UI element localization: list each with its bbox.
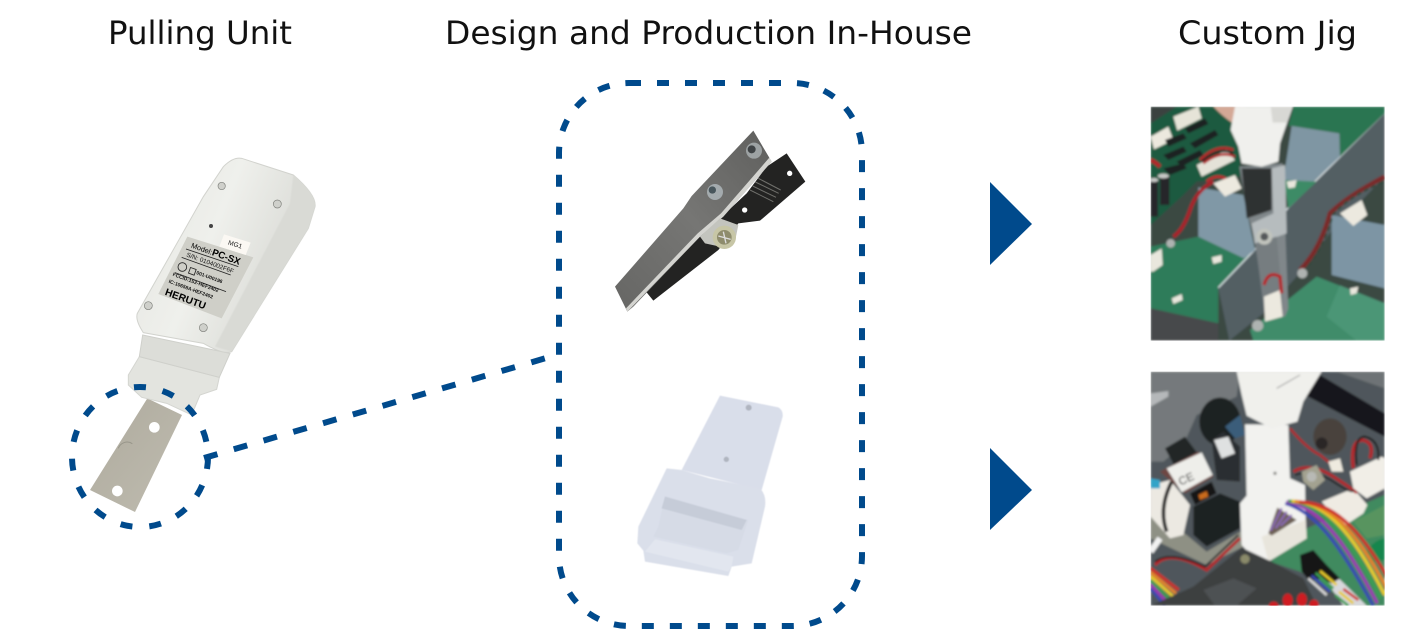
dashed connector line: [204, 356, 553, 458]
white plastic jig: [637, 396, 783, 576]
lower right green board: [1250, 277, 1385, 341]
white printed jig: [1240, 424, 1307, 562]
rainbow ribbon cable: [1285, 501, 1393, 606]
left wires: [1173, 182, 1213, 237]
photo background: [1151, 372, 1385, 606]
right white connectors: [1350, 457, 1385, 498]
upper right green board: [1288, 107, 1385, 157]
left white connector: [1151, 480, 1190, 538]
small rainbow ribbon left: [1151, 568, 1179, 606]
right connector wires: [1353, 440, 1371, 468]
dark black connector: [1300, 550, 1340, 583]
heading: Pulling Unit: Pulling Unit: [108, 14, 292, 52]
grip block: [637, 468, 765, 576]
nut: [1302, 465, 1325, 490]
product label: S/N: 0104002F6F: [185, 252, 235, 275]
right divider panel: [1332, 215, 1385, 288]
top connector wires: [1207, 177, 1230, 182]
photo: clip jig on circuit boards: [1150, 107, 1385, 341]
screws: [707, 143, 762, 200]
metal clip on photo: [1239, 163, 1288, 317]
screws: [1166, 239, 1307, 331]
lower left board connectors: [1151, 248, 1222, 304]
rear black plate: [646, 153, 805, 301]
long divider wall: [1218, 113, 1385, 341]
pulling unit body: [1231, 107, 1293, 167]
housing side shading: [215, 175, 315, 352]
screws: [144, 182, 281, 332]
dark round hole: [1199, 398, 1241, 446]
cable tie: [1328, 458, 1343, 472]
chassis wall: [1151, 372, 1240, 462]
capacitors: [1150, 160, 1169, 217]
photo background: [1151, 107, 1385, 341]
green circuit board: [1270, 495, 1385, 606]
neck: [139, 335, 230, 377]
floor under boards: [1151, 308, 1218, 341]
sensor hole: [209, 224, 213, 228]
pivot bolt: [700, 218, 738, 249]
unit label: [1271, 107, 1292, 123]
metal clip jig: [615, 131, 805, 312]
green capacitor: [1367, 538, 1385, 562]
tongue holes: [746, 405, 752, 411]
front metal plate: [615, 131, 772, 312]
product label: Model:PC-SX: [190, 240, 242, 268]
dashed circle highlighting the tab: [72, 387, 208, 527]
grip recess: [653, 496, 748, 553]
red LEDs: [1269, 593, 1319, 610]
black rail top right: [1305, 375, 1385, 437]
small ribbons bottom: [1308, 571, 1358, 606]
right side wires: [1300, 177, 1385, 270]
insert tongue: [682, 396, 783, 490]
metal tab: [90, 398, 182, 512]
CE labelled capacitor: [1160, 452, 1213, 493]
connector on board: [1350, 287, 1358, 295]
dashed rounded panel: [559, 83, 862, 626]
product label: IC:10658A-HEF2402: [168, 279, 214, 301]
grip lower lip: [645, 539, 733, 572]
product label: HERUTU: [163, 287, 207, 312]
product label: 001-U00196: [195, 270, 223, 285]
lower left board: [1150, 518, 1243, 566]
spring: [750, 178, 781, 202]
pulling unit body: [1237, 372, 1322, 428]
threaded post: [1313, 418, 1347, 455]
upper left circuit board: [1151, 107, 1240, 225]
heading: Design and Production In-House: Design and Production In-House: [445, 14, 972, 52]
left divider panel: [1198, 187, 1255, 258]
white collar: [128, 357, 219, 415]
arrow: top: [990, 182, 1032, 265]
dark foreground board: [1151, 548, 1317, 606]
connector on clip: [1264, 275, 1283, 322]
rear plate holes: [742, 171, 792, 213]
jig pin hole: [1273, 472, 1277, 475]
product label: MG1: [227, 240, 243, 251]
CE labelled capacitor: CE: [1177, 471, 1197, 488]
finger: [1212, 106, 1236, 124]
heading: Custom Jig: Custom Jig: [1178, 14, 1357, 52]
photo: white jig on connector: [1151, 372, 1393, 610]
pulling unit device: [90, 158, 315, 512]
green board behind jig: [1284, 180, 1317, 208]
product label: [158, 234, 253, 318]
capacitors and transformer: [1165, 415, 1245, 482]
target connector: [1262, 508, 1307, 561]
unit seam: [1277, 375, 1300, 388]
white ribbon backing: [1322, 562, 1367, 606]
product label: FCCID:1S2-HEF2402: [172, 272, 219, 294]
arrow: bottom: [990, 448, 1032, 530]
lower left wires: [1155, 538, 1240, 570]
housing: [137, 158, 315, 352]
lower left green board: [1151, 237, 1253, 323]
black relay: [1193, 493, 1240, 547]
